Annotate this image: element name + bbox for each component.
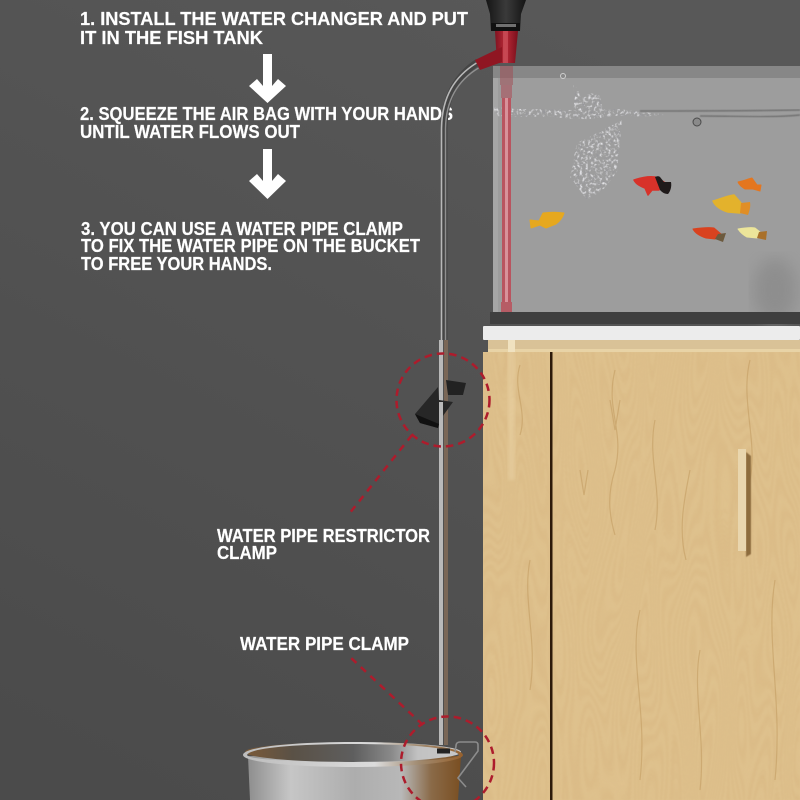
- clamp upper piece: [446, 380, 466, 395]
- arrow: step 1 to step 2: [249, 54, 286, 103]
- door gap: [550, 352, 552, 800]
- tank base: [490, 312, 800, 324]
- wood grain: [518, 360, 777, 790]
- restrictor callout circle: [396, 354, 490, 446]
- label: water pipe restrictor clamp: [217, 526, 430, 563]
- bucket rim: [243, 742, 463, 767]
- cabinet: [483, 340, 800, 800]
- restrictor callout leader: [349, 435, 412, 514]
- air bag base: [486, 0, 526, 31]
- tank top rim: [493, 66, 800, 78]
- bubbles: [560, 74, 701, 200]
- bucket interior: [245, 742, 461, 762]
- step 3 text: [81, 219, 420, 274]
- step 2 text: [80, 104, 453, 142]
- bucket: [243, 742, 463, 800]
- water surface: [494, 107, 800, 119]
- step 2 text: UNTIL WATER FLOWS OUT: [80, 122, 300, 142]
- step 1 text: [80, 9, 468, 48]
- fish tank: [490, 66, 800, 324]
- restrictor clamp: [415, 380, 466, 428]
- step 1 text: IT IN THE FISH TANK: [80, 28, 263, 48]
- instructions text: [80, 9, 468, 274]
- water pipe with curve: [441, 62, 478, 745]
- arrow: step 2 to step 3: [249, 149, 286, 199]
- pipe clamp on bucket: [437, 742, 478, 787]
- fish: small orange: [738, 178, 761, 191]
- step 3 text: TO FIX THE WATER PIPE ON THE BUCKET: [81, 236, 420, 256]
- step 1 text: 1. INSTALL THE WATER CHANGER AND PUT: [80, 9, 468, 29]
- fish: golden: [530, 212, 564, 228]
- fish: large yellow: [713, 195, 750, 215]
- clamp lower piece: [415, 387, 453, 428]
- tank water body: [493, 66, 800, 312]
- step 2 text: 2. SQUEEZE THE AIR BAG WITH YOUR HANDS: [80, 104, 453, 124]
- bucket body: [248, 756, 461, 800]
- label: water pipe restrictor clamp: WATER PIPE RESTRICTOR: [217, 526, 430, 546]
- white counter top: [483, 326, 800, 340]
- pipe clamp callout circle: [401, 716, 494, 800]
- label: water pipe restrictor clamp: CLAMP: [217, 543, 277, 563]
- label: water pipe clamp: WATER PIPE CLAMP: [240, 634, 409, 654]
- step 3 text: 3. YOU CAN USE A WATER PIPE CLAMP: [81, 219, 403, 239]
- step 3 text: TO FREE YOUR HANDS.: [81, 254, 272, 274]
- fish: red orange: [693, 228, 726, 242]
- cabinet top band: [488, 340, 800, 352]
- door handle: [738, 449, 751, 557]
- fish: pale yellow: [738, 228, 767, 240]
- shadow in water: [753, 258, 797, 322]
- red connector: [495, 31, 518, 63]
- red pipe in tank: [500, 66, 513, 312]
- pipe clamp callout leader: [350, 657, 423, 725]
- fish: red with black tail: [634, 176, 671, 195]
- air bag and connector: [475, 0, 526, 70]
